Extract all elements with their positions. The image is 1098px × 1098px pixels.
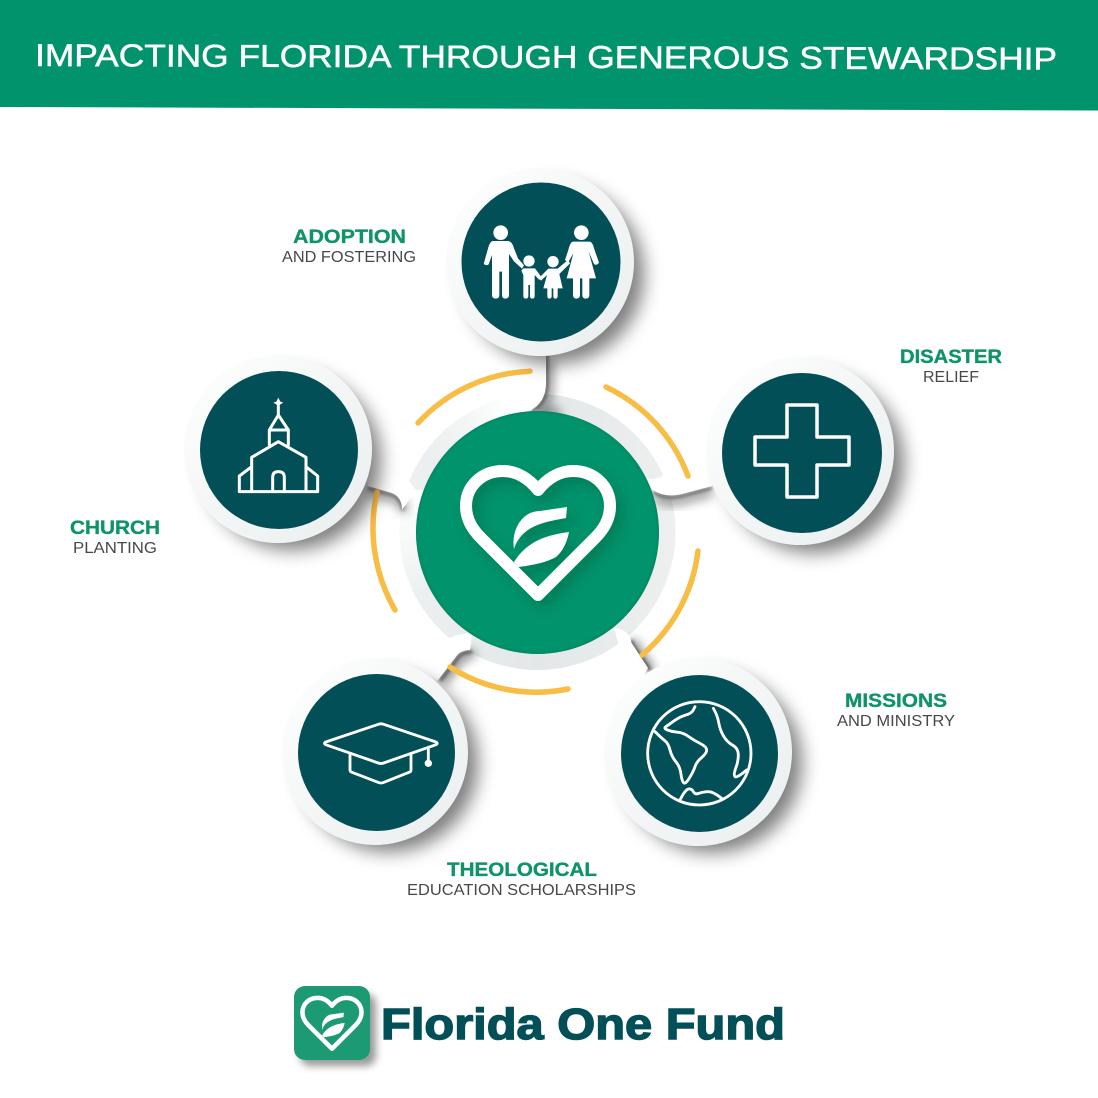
label: theological education scholarships: THEOLOGICAL [447, 859, 597, 881]
hub ring [400, 394, 676, 670]
label: church planting [70, 517, 160, 557]
header banner [0, 0, 1098, 110]
icon: church [239, 398, 318, 492]
node: church planting [184, 355, 381, 550]
connector: disaster [645, 468, 712, 501]
label: missions and ministry: MISSIONS [845, 690, 947, 712]
label: disaster relief: RELIEF [923, 369, 979, 386]
label: church planting: PLANTING [73, 540, 157, 557]
title: IMPACTING FLORIDA THROUGH GENEROUS STEWARDSHIP [35, 37, 1057, 77]
icon: globe [648, 702, 751, 805]
node: theological education [282, 659, 478, 852]
connector: adoption [510, 350, 560, 414]
label: adoption: AND FOSTERING [282, 249, 416, 266]
yellow arc: right [642, 551, 698, 655]
connector: missions [614, 628, 652, 690]
icon: family [484, 225, 599, 299]
label: disaster relief [900, 346, 1002, 386]
label: missions and ministry [837, 690, 955, 730]
label: adoption [282, 226, 416, 266]
node: adoption [446, 168, 644, 364]
label: adoption: ADOPTION [293, 226, 406, 248]
hub green circle [416, 411, 659, 654]
icon: heart and leaf [466, 471, 610, 595]
label: missions and ministry: AND MINISTRY [837, 713, 955, 730]
label: disaster relief: DISASTER [900, 346, 1002, 368]
connector: church [368, 470, 416, 512]
label: theological education scholarships [407, 859, 636, 899]
icon: graduation cap [324, 724, 437, 783]
logo icon [294, 986, 370, 1060]
connector: theological [418, 633, 475, 683]
node: missions and ministry [604, 658, 802, 853]
logo wordmark: Florida One Fund [381, 1000, 785, 1049]
icon: medical cross [755, 405, 849, 497]
node: disaster relief [706, 357, 904, 553]
yellow arc: top right [606, 387, 688, 476]
yellow arc: left [373, 492, 395, 610]
yellow arc: bottom [450, 667, 568, 692]
label: theological education scholarships: EDUCATION SCHOLARSHIPS [407, 882, 636, 899]
label: church planting: CHURCH [70, 517, 160, 539]
yellow arc: top left [418, 371, 530, 423]
logo: Florida One Fund [294, 986, 785, 1066]
central hub diagram [368, 350, 712, 692]
